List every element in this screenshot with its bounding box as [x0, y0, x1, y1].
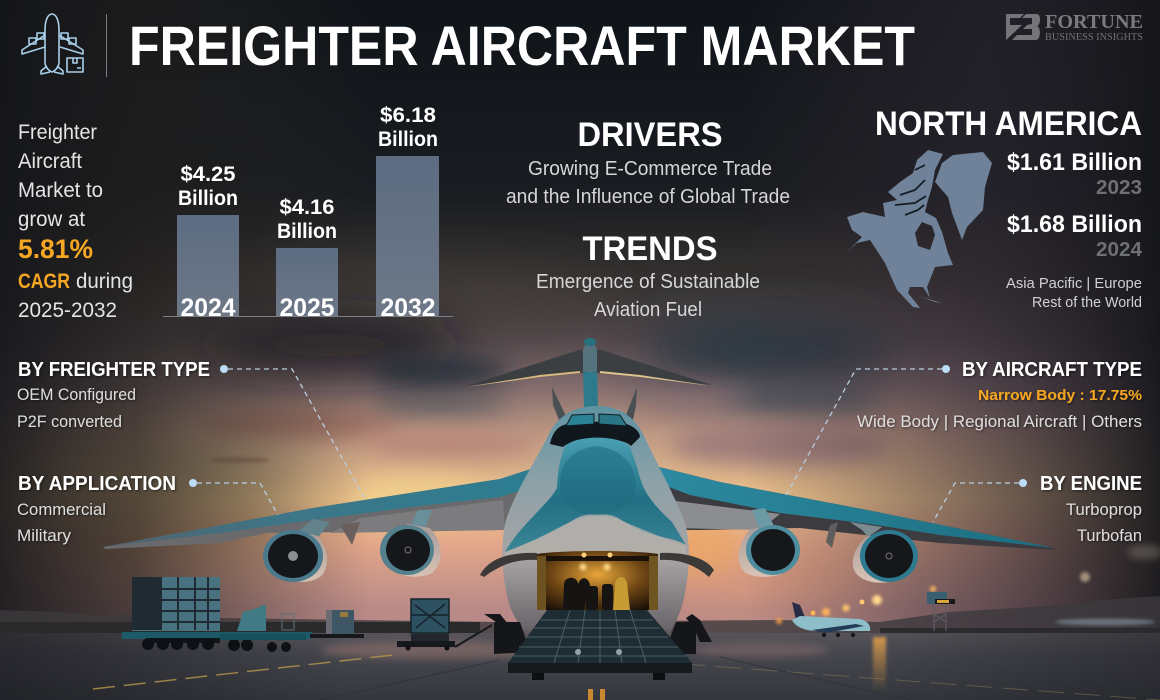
cargo door opening: [537, 551, 658, 610]
text block: by freighter type: P2F converted: [17, 412, 122, 431]
text block: by aircraft type: [857, 359, 1142, 431]
bar 2032: [376, 104, 439, 322]
text block: by application: [17, 473, 176, 545]
dashed connector: by freighter type: [220, 365, 364, 497]
cockpit band and windows: [550, 414, 640, 447]
pylons: [752, 508, 774, 530]
logo: Fortune Business Insights: [1006, 11, 1143, 43]
cargo: ULD near ramp: [397, 599, 492, 650]
fuselage: [502, 406, 689, 652]
Caribbean islands: [916, 295, 942, 303]
text block: CAGR summary: grow at: [18, 208, 85, 231]
right outer engine: [853, 530, 918, 583]
Arctic channels: [895, 165, 926, 215]
text block: by freighter type: OEM Configured: [17, 385, 136, 404]
right wing with engines: [655, 466, 1055, 583]
runway yellow marking: [93, 655, 393, 689]
tail fin and tailplane: [466, 338, 712, 420]
text block: North America values: $1.68 Billion: [1007, 211, 1142, 238]
bar 2024: 2024: [180, 294, 236, 322]
tug cart: [237, 605, 266, 631]
bar 2032: Billion: [378, 128, 438, 151]
storm clouds: [50, 265, 900, 606]
bar 2025: Billion: [277, 220, 337, 243]
distant parked aircraft on the right: [1055, 618, 1155, 626]
loading ramp: [508, 610, 692, 680]
text block: trends: Emergence of Sustainable: [536, 271, 760, 293]
left inner engine: [380, 524, 441, 577]
text block: CAGR summary: 5.81%: [18, 234, 93, 264]
text block: CAGR summary: Market to: [18, 179, 103, 202]
text block: by aircraft type: Narrow Body : 17.75%: [978, 387, 1142, 404]
text block: by engine: Turbofan: [1077, 526, 1142, 545]
pylons: [296, 519, 330, 540]
text block: North America values: $1.61 Billion: [1007, 149, 1142, 176]
title: FREIGHTER AIRCRAFT MARKET: [129, 14, 915, 77]
text block: North America values: Asia Pacific | Europe: [1006, 275, 1142, 292]
text block: drivers: and the Influence of Global Trade: [506, 186, 790, 208]
text block: CAGR summary: Freighter: [18, 121, 97, 144]
text block: by engine: [1040, 473, 1142, 545]
light reflection on wet tarmac: [873, 637, 886, 692]
bar chart: market size: [177, 104, 439, 322]
text block: by application: BY APPLICATION: [18, 473, 176, 495]
nose: [505, 438, 686, 552]
text block: trends: Aviation Fuel: [594, 299, 702, 321]
logo wordmark: FORTUNE: [1045, 11, 1143, 33]
bar 2025: [276, 196, 338, 322]
icon: freighter plane with parcel: [22, 14, 83, 74]
text block: North America values: Rest of the World: [1032, 294, 1142, 311]
horizon tree line and ground: [0, 596, 1160, 700]
bar 2025: $4.16: [280, 196, 334, 219]
text block: CAGR summary: 2025-2032: [18, 299, 117, 322]
bar 2032: $6.18: [380, 104, 436, 127]
text block: trends: TRENDS: [582, 230, 718, 268]
text block: by application: Military: [17, 526, 71, 545]
Greenland: [935, 152, 992, 240]
dashed connector: by engine: [933, 479, 1027, 522]
text block: by aircraft type: BY AIRCRAFT TYPE: [962, 359, 1142, 381]
text block: by aircraft type: Wide Body | Regional Aircraft | Others: [857, 412, 1142, 431]
text block: North America values: [1006, 149, 1143, 311]
text block: drivers: DRIVERS: [578, 116, 722, 154]
text block: by freighter type: [17, 359, 210, 431]
text block: CAGR summary: during: [76, 270, 133, 293]
text block: CAGR summary: Aircraft: [18, 150, 82, 173]
chart baseline: [163, 316, 453, 317]
right inner engine: [739, 524, 800, 577]
text block: CAGR summary: CAGR: [18, 270, 70, 293]
bar 2032: 2032: [380, 294, 436, 322]
bar 2025: 2025: [280, 294, 335, 322]
heading: North America: NORTH AMERICA: [875, 105, 1142, 143]
cargo: large ULD on dolly: [122, 577, 312, 652]
cargo door arms: [480, 553, 714, 577]
bar 2024: $4.25: [180, 163, 236, 186]
text block: by freighter type: BY FREIGHTER TYPE: [18, 359, 210, 381]
text block: by application: Commercial: [17, 500, 106, 519]
bar 2024: [177, 163, 239, 322]
dashed connector: by aircraft type: [785, 365, 950, 497]
header divider: [106, 14, 107, 77]
text block: by engine: BY ENGINE: [1040, 473, 1142, 495]
text block: North America values: 2023: [1096, 177, 1142, 199]
text block: drivers: Growing E-Commerce Trade: [528, 158, 772, 180]
left wing with engines: [103, 466, 540, 582]
chin below nose: [505, 516, 686, 556]
map: North America: [847, 150, 992, 308]
cargo: mid ULD: [310, 610, 364, 638]
distant passenger aircraft: [792, 602, 870, 637]
text block: drivers: [506, 116, 790, 208]
text block: CAGR summary: [18, 121, 133, 322]
text block: trends: [536, 230, 760, 321]
text block: North America values: 2024: [1096, 239, 1143, 261]
text block: by engine: Turboprop: [1066, 500, 1142, 519]
control tower: [927, 592, 955, 631]
bar 2024: Billion: [178, 187, 238, 210]
airport lights: [776, 545, 1160, 624]
dashed connector: by application: [189, 479, 278, 515]
landing gear: [484, 614, 712, 654]
logo mark: [1006, 14, 1040, 40]
left outer engine: [263, 530, 327, 582]
logo: Fortune Business Insights: BUSINESS INSIGHTS: [1045, 32, 1143, 43]
workers: [563, 577, 630, 610]
mainland and Arctic islands: [847, 150, 953, 308]
hero freighter aircraft: [103, 338, 1055, 680]
